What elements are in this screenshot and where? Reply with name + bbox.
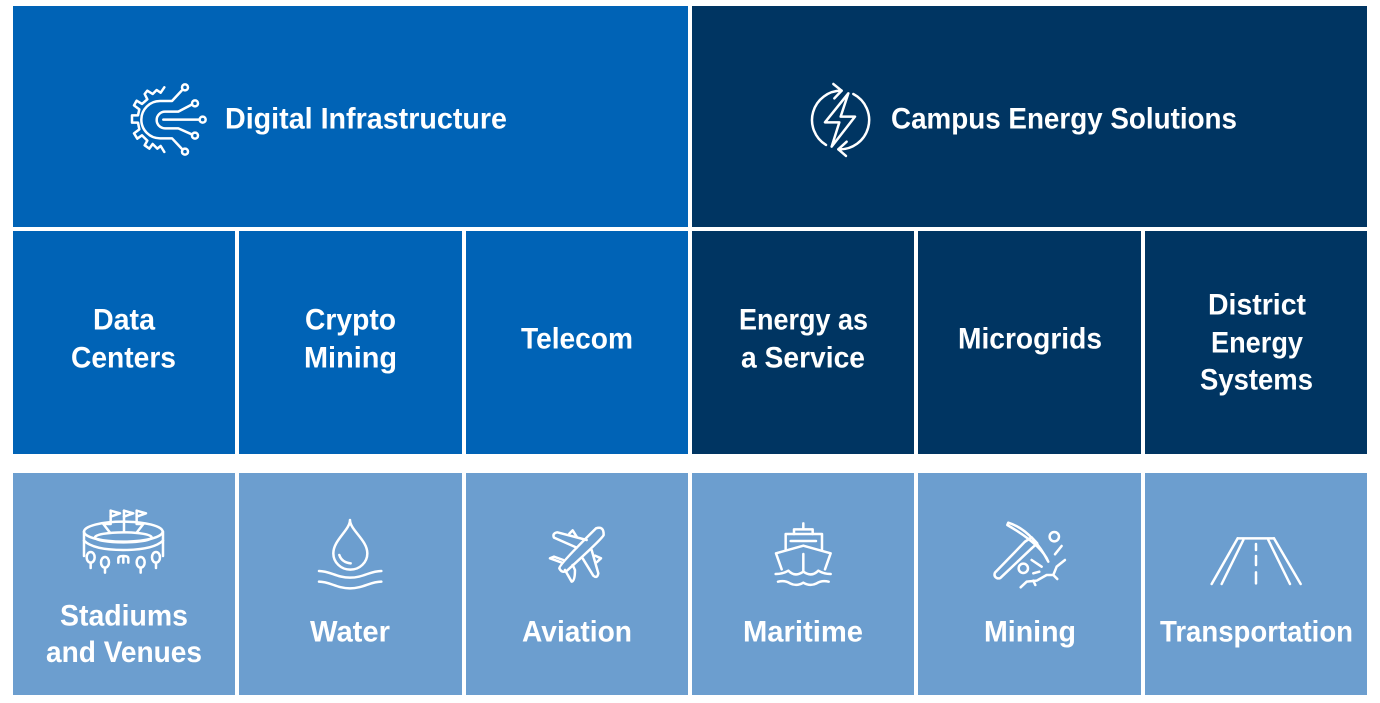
heading: Campus Energy Solutions: Campus Energy Solutions [891,102,1237,136]
icon: circuit gear [132,84,206,155]
icon: ship [776,523,831,585]
panel: Energy as a Service: a Service [741,342,865,374]
panel: Data Centers: Centers [71,342,176,374]
panel: Microgrids [918,231,1141,454]
panel: Crypto Mining [239,231,462,454]
panel: Energy as a Service: Energy as [739,304,868,336]
icon: pickaxe and rocks [994,523,1065,587]
panel: Microgrids: Microgrids [958,322,1102,356]
icon: water drop [319,520,381,588]
panel: Crypto Mining: Mining [304,342,397,374]
panel: District Energy Systems: Energy [1211,326,1303,360]
panel: Maritime: Maritime [743,616,863,648]
panel: Transportation: Transportation [1160,616,1353,648]
panel: Data Centers [13,231,235,454]
icon: airplane [550,528,604,582]
panel: District Energy Systems [1145,231,1367,454]
panel: Stadiums and Venues: and Venues [46,636,202,669]
panel: Telecom: Telecom [521,322,633,356]
panel: Aviation: Aviation [522,616,632,648]
panel: Mining [918,473,1141,695]
panel: Energy as a Service [692,231,914,454]
heading: Digital Infrastructure: Digital Infrastructure [225,102,507,136]
panel: Mining: Mining [984,616,1076,648]
panel: Transportation [1145,473,1367,695]
icon: lightning bolt with cycle arrows [812,84,869,156]
panel: Aviation [466,473,688,695]
panel: Stadiums and Venues: Stadiums [60,600,188,632]
panel: District Energy Systems: Systems [1200,364,1313,396]
panel: Digital Infrastructure header [13,6,688,227]
panel: Water: Water [310,616,390,648]
panel: Campus Energy Solutions header [692,6,1367,227]
panel: Stadiums and Venues [13,473,235,695]
panel: Water [239,473,462,695]
panel: Crypto Mining: Crypto [305,304,396,336]
panel: Maritime [692,473,914,695]
panel: District Energy Systems: District [1208,288,1306,322]
panel: Telecom [466,231,688,454]
panel: Data Centers: Data [93,304,155,336]
icon: road [1212,538,1301,584]
icon: stadium [84,511,163,573]
